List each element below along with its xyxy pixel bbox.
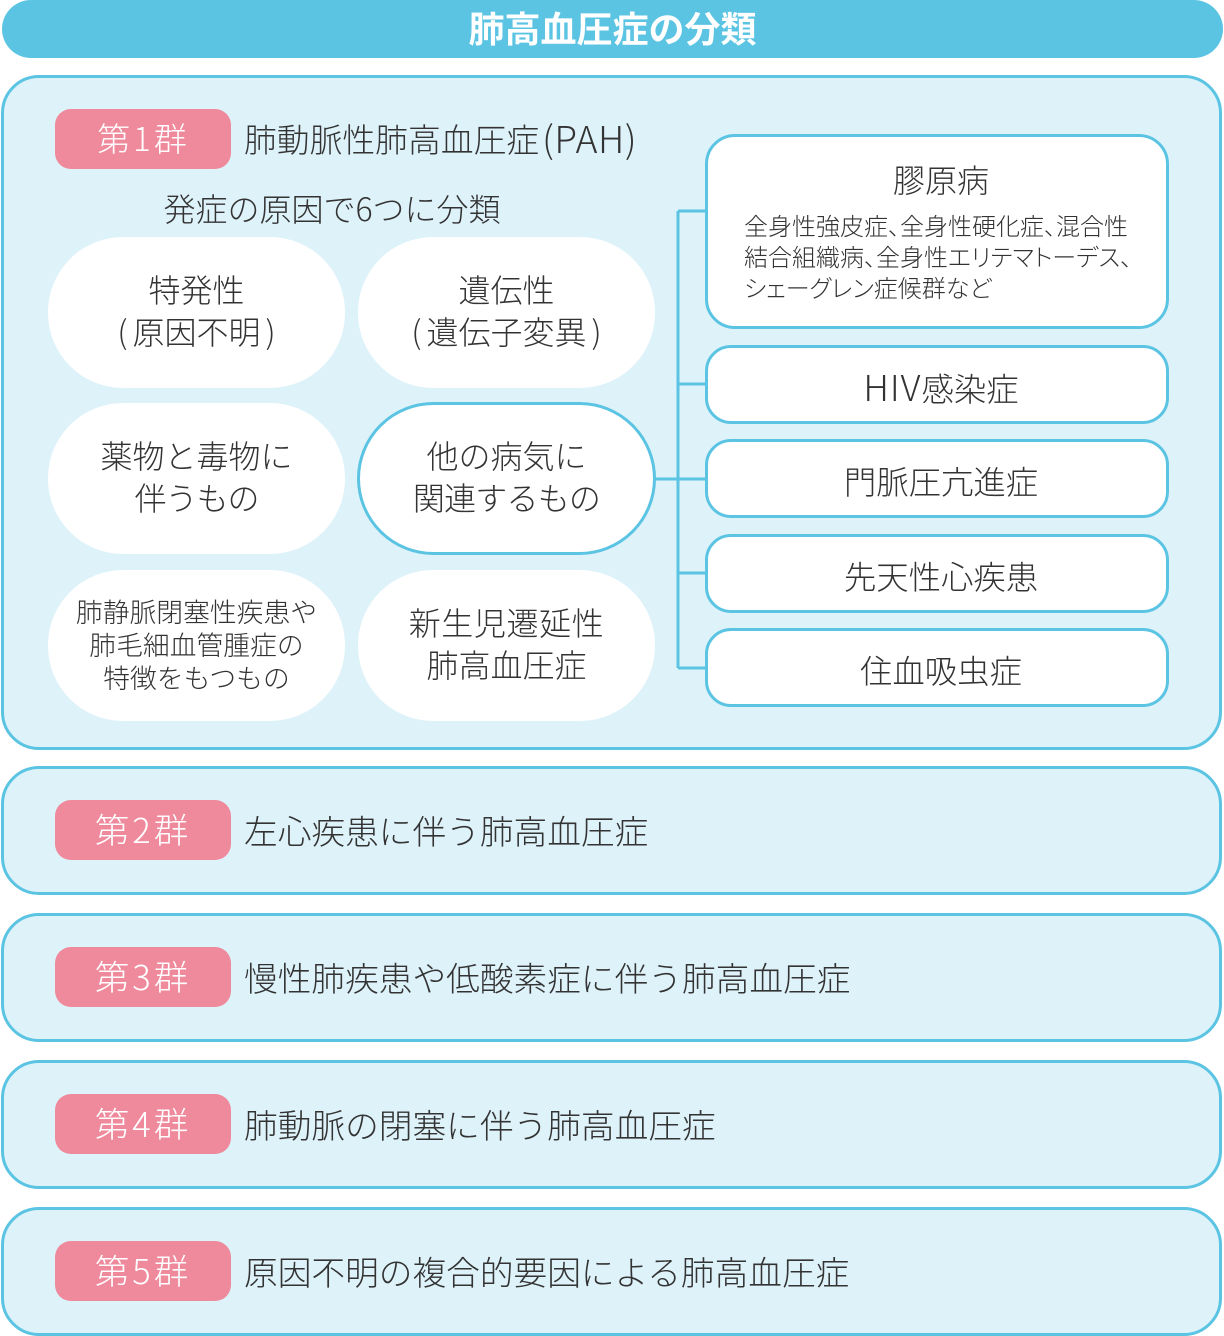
pill: PVOD <box>48 570 345 721</box>
box: HIV: HIV感染症 <box>863 360 1019 412</box>
badge: group 3 <box>55 947 231 1007</box>
pill: idiopathic: (原因不明) <box>117 308 276 354</box>
badge: group 2: 第2群 <box>95 803 191 853</box>
pill: PVOD: 肺静脈閉塞性疾患や <box>76 590 317 630</box>
pill: neonatal: 肺高血圧症 <box>426 641 586 687</box>
box: portal hypertension: 門脈圧亢進症 <box>844 457 1038 504</box>
box: collagen disease <box>705 134 1169 329</box>
collagen details: 結合組織病、全身性エリテマトーデス、 <box>744 238 1132 273</box>
panel: group 5 <box>1 1207 1222 1336</box>
pill: hereditary <box>358 237 655 388</box>
badge: group 4: 第4群 <box>95 1097 191 1147</box>
badge: group 2 <box>55 800 231 860</box>
pill: idiopathic <box>48 237 345 388</box>
panel: group 3 <box>1 913 1222 1042</box>
box: HIV <box>705 345 1169 424</box>
subheading: six causes: 発症の原因で6つに分類 <box>163 185 501 231</box>
connector lines <box>656 210 705 670</box>
pill: PVOD: 特徴をもつもの <box>103 656 290 696</box>
badge: group 1 <box>55 109 231 169</box>
title bar <box>2 0 1223 58</box>
pill: idiopathic: 特発性 <box>148 266 244 312</box>
pill: neonatal <box>358 570 655 721</box>
collagen heading: 膠原病 <box>893 156 989 202</box>
collagen details <box>744 207 1132 304</box>
heading: group 1: 肺動脈性肺高血圧症(PAH) <box>244 110 637 164</box>
pill: hereditary: 遺伝性 <box>458 266 554 312</box>
heading: group 2: 左心疾患に伴う肺高血圧症 <box>244 805 648 854</box>
panel: group 4 <box>1 1060 1222 1189</box>
badge: group 5: 第5群 <box>95 1244 191 1294</box>
title bar: 肺高血圧症の分類 <box>468 1 756 53</box>
pill: drugs and toxins: 薬物と毒物に <box>100 432 292 478</box>
panel: group 2 <box>1 766 1222 895</box>
pill: associated diseases: 他の病気に <box>426 432 586 478</box>
pill: neonatal: 新生児遷延性 <box>409 599 604 645</box>
collagen details: シェーグレン症候群など <box>744 269 992 304</box>
box: schistosomiasis: 住血吸虫症 <box>860 646 1022 693</box>
badge: group 1: 第1群 <box>97 113 190 161</box>
heading: group 5: 原因不明の複合的要因による肺高血圧症 <box>244 1246 849 1295</box>
pill: drugs and toxins: 伴うもの <box>134 474 258 520</box>
badge: group 4 <box>55 1094 231 1154</box>
pill: hereditary: (遺伝子変異) <box>411 308 602 354</box>
badge: group 5 <box>55 1241 231 1301</box>
pill: drugs and toxins <box>48 403 345 554</box>
pill: associated diseases: 関連するもの <box>413 474 600 520</box>
heading: group 3: 慢性肺疾患や低酸素症に伴う肺高血圧症 <box>244 952 850 1001</box>
collagen details: 全身性強皮症、全身性硬化症、混合性 <box>744 207 1128 242</box>
heading: group 4: 肺動脈の閉塞に伴う肺高血圧症 <box>244 1099 716 1148</box>
box: congenital heart disease <box>705 534 1169 613</box>
pill: PVOD: 肺毛細血管腫症の <box>89 624 304 662</box>
badge: group 3: 第3群 <box>95 950 191 1000</box>
box: portal hypertension <box>705 439 1169 518</box>
box: schistosomiasis <box>705 628 1169 707</box>
box: congenital heart disease: 先天性心疾患 <box>844 552 1038 599</box>
pill: associated diseases <box>357 402 656 555</box>
panel: group 1 <box>1 75 1222 750</box>
